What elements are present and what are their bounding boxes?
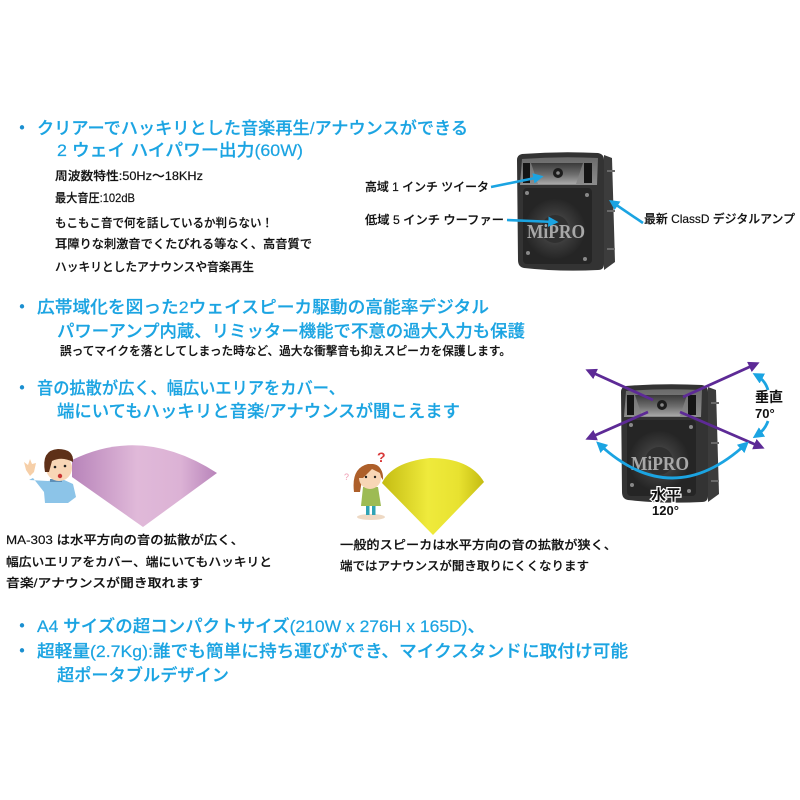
- arrow: tweeter: [491, 177, 540, 187]
- section 1 heading: [14, 118, 468, 160]
- speaker photo: dispersion: [621, 384, 719, 503]
- vertical arc arrows: [756, 375, 768, 436]
- description text: ハッキリとしたアナウンスや音楽再生: [55, 259, 254, 274]
- caption: MA-303: MA-303 は水平方向の音の拡散が広く、: [6, 532, 244, 547]
- speaker photo: dispersion: MiPRO: [631, 453, 689, 475]
- section 4 heading: [14, 616, 628, 685]
- pink sound fan: [72, 445, 217, 527]
- boy illustration: [24, 449, 76, 503]
- caption: MA-303: 幅広いエリアをカバー、端にいてもハッキリと: [6, 554, 272, 569]
- caption: general speaker: 端ではアナウンスが聞き取りにくくなります: [340, 558, 589, 573]
- label: vertical 70 degrees: [755, 389, 783, 421]
- horizontal arc arrow: [599, 444, 746, 478]
- caption: MA-303: 音楽/アナウンスが聞き取れます: [6, 575, 203, 590]
- section 3 heading: 端にいてもハッキリと音楽/アナウンスが聞こえます: [57, 401, 460, 421]
- label: amplifier: 最新 ClassD デジタルアンプ: [644, 211, 795, 226]
- speaker photo: components: [517, 152, 615, 271]
- label: tweeter: 高域 1 インチ ツイータ: [365, 179, 489, 194]
- arrow: woofer: [507, 220, 555, 222]
- speaker dispersion diagram: [589, 364, 783, 518]
- caption: MA-303: [6, 532, 272, 590]
- section 2 heading: [14, 297, 525, 341]
- speaker photo: components: MiPRO: [527, 221, 585, 243]
- section 4 heading: ・: [14, 617, 30, 636]
- section 4 heading: 超ポータブルデザイン: [57, 665, 229, 685]
- section 2 note: 誤ってマイクを落としてしまった時など、過大な衝撃音も抑えスピーカを保護します。: [60, 343, 511, 358]
- description text: [55, 215, 312, 274]
- label: vertical 70 degrees: 70°: [755, 406, 775, 421]
- section 3 heading: 音の拡散が広く、幅広いエリアをカバー、: [37, 378, 345, 398]
- girl illustration: ?: [377, 449, 386, 465]
- section 1 heading: クリアーでハッキリとした音楽再生/アナウンスができる: [37, 118, 468, 138]
- specifications text: [55, 168, 203, 205]
- label: vertical 70 degrees: 垂直: [755, 389, 783, 405]
- caption: general speaker: [340, 537, 617, 573]
- specifications text: 周波数特性:50Hz～18KHz: [55, 168, 203, 183]
- description text: もこもこ音で何を話しているか判らない！: [55, 215, 273, 230]
- label: horizontal 120 degrees: 水平: [651, 487, 681, 504]
- specifications text: 最大音圧:102dB: [55, 190, 135, 205]
- wide dispersion fan and boy: [24, 445, 217, 527]
- caption: general speaker: 一般的スピーカは水平方向の音の拡散が狭く、: [340, 537, 617, 552]
- section 3 heading: ・: [14, 379, 30, 398]
- label: woofer: 低域 5 インチ ウーファー: [365, 213, 504, 227]
- girl illustration: [344, 449, 386, 520]
- purple dispersion arrows: [589, 364, 761, 447]
- section 2 heading: 広帯域化を図った2ウェイスピーカ駆動の高能率デジタル: [37, 297, 489, 317]
- section 1 heading: 2 ウェイ ハイパワー出力(60W): [57, 141, 303, 160]
- section 2 heading: パワーアンプ内蔵、リミッター機能で不意の過大入力も保護: [57, 322, 525, 341]
- narrow dispersion fan and girl: [344, 449, 484, 535]
- section 4 heading: 超軽量(2.7Kg):誰でも簡単に持ち運びができ、マイクスタンドに取付け可能: [37, 641, 628, 661]
- section 2 heading: ・: [14, 298, 30, 317]
- description text: 耳障りな刺激音でくたびれる等なく、高音質で: [55, 236, 312, 251]
- label: horizontal 120 degrees: 120°: [652, 503, 679, 518]
- girl illustration: ?: [344, 472, 349, 482]
- section 1 heading: ・: [14, 119, 30, 138]
- arrow: amplifier: [612, 202, 643, 223]
- section 3 heading: [14, 378, 460, 421]
- section 4 heading: A4 サイズの超コンパクトサイズ(210W x 276H x 165D)、: [37, 616, 485, 636]
- section 4 heading: ・: [14, 642, 30, 661]
- label: horizontal 120 degrees: [651, 487, 681, 518]
- yellow sound fan: [382, 458, 484, 535]
